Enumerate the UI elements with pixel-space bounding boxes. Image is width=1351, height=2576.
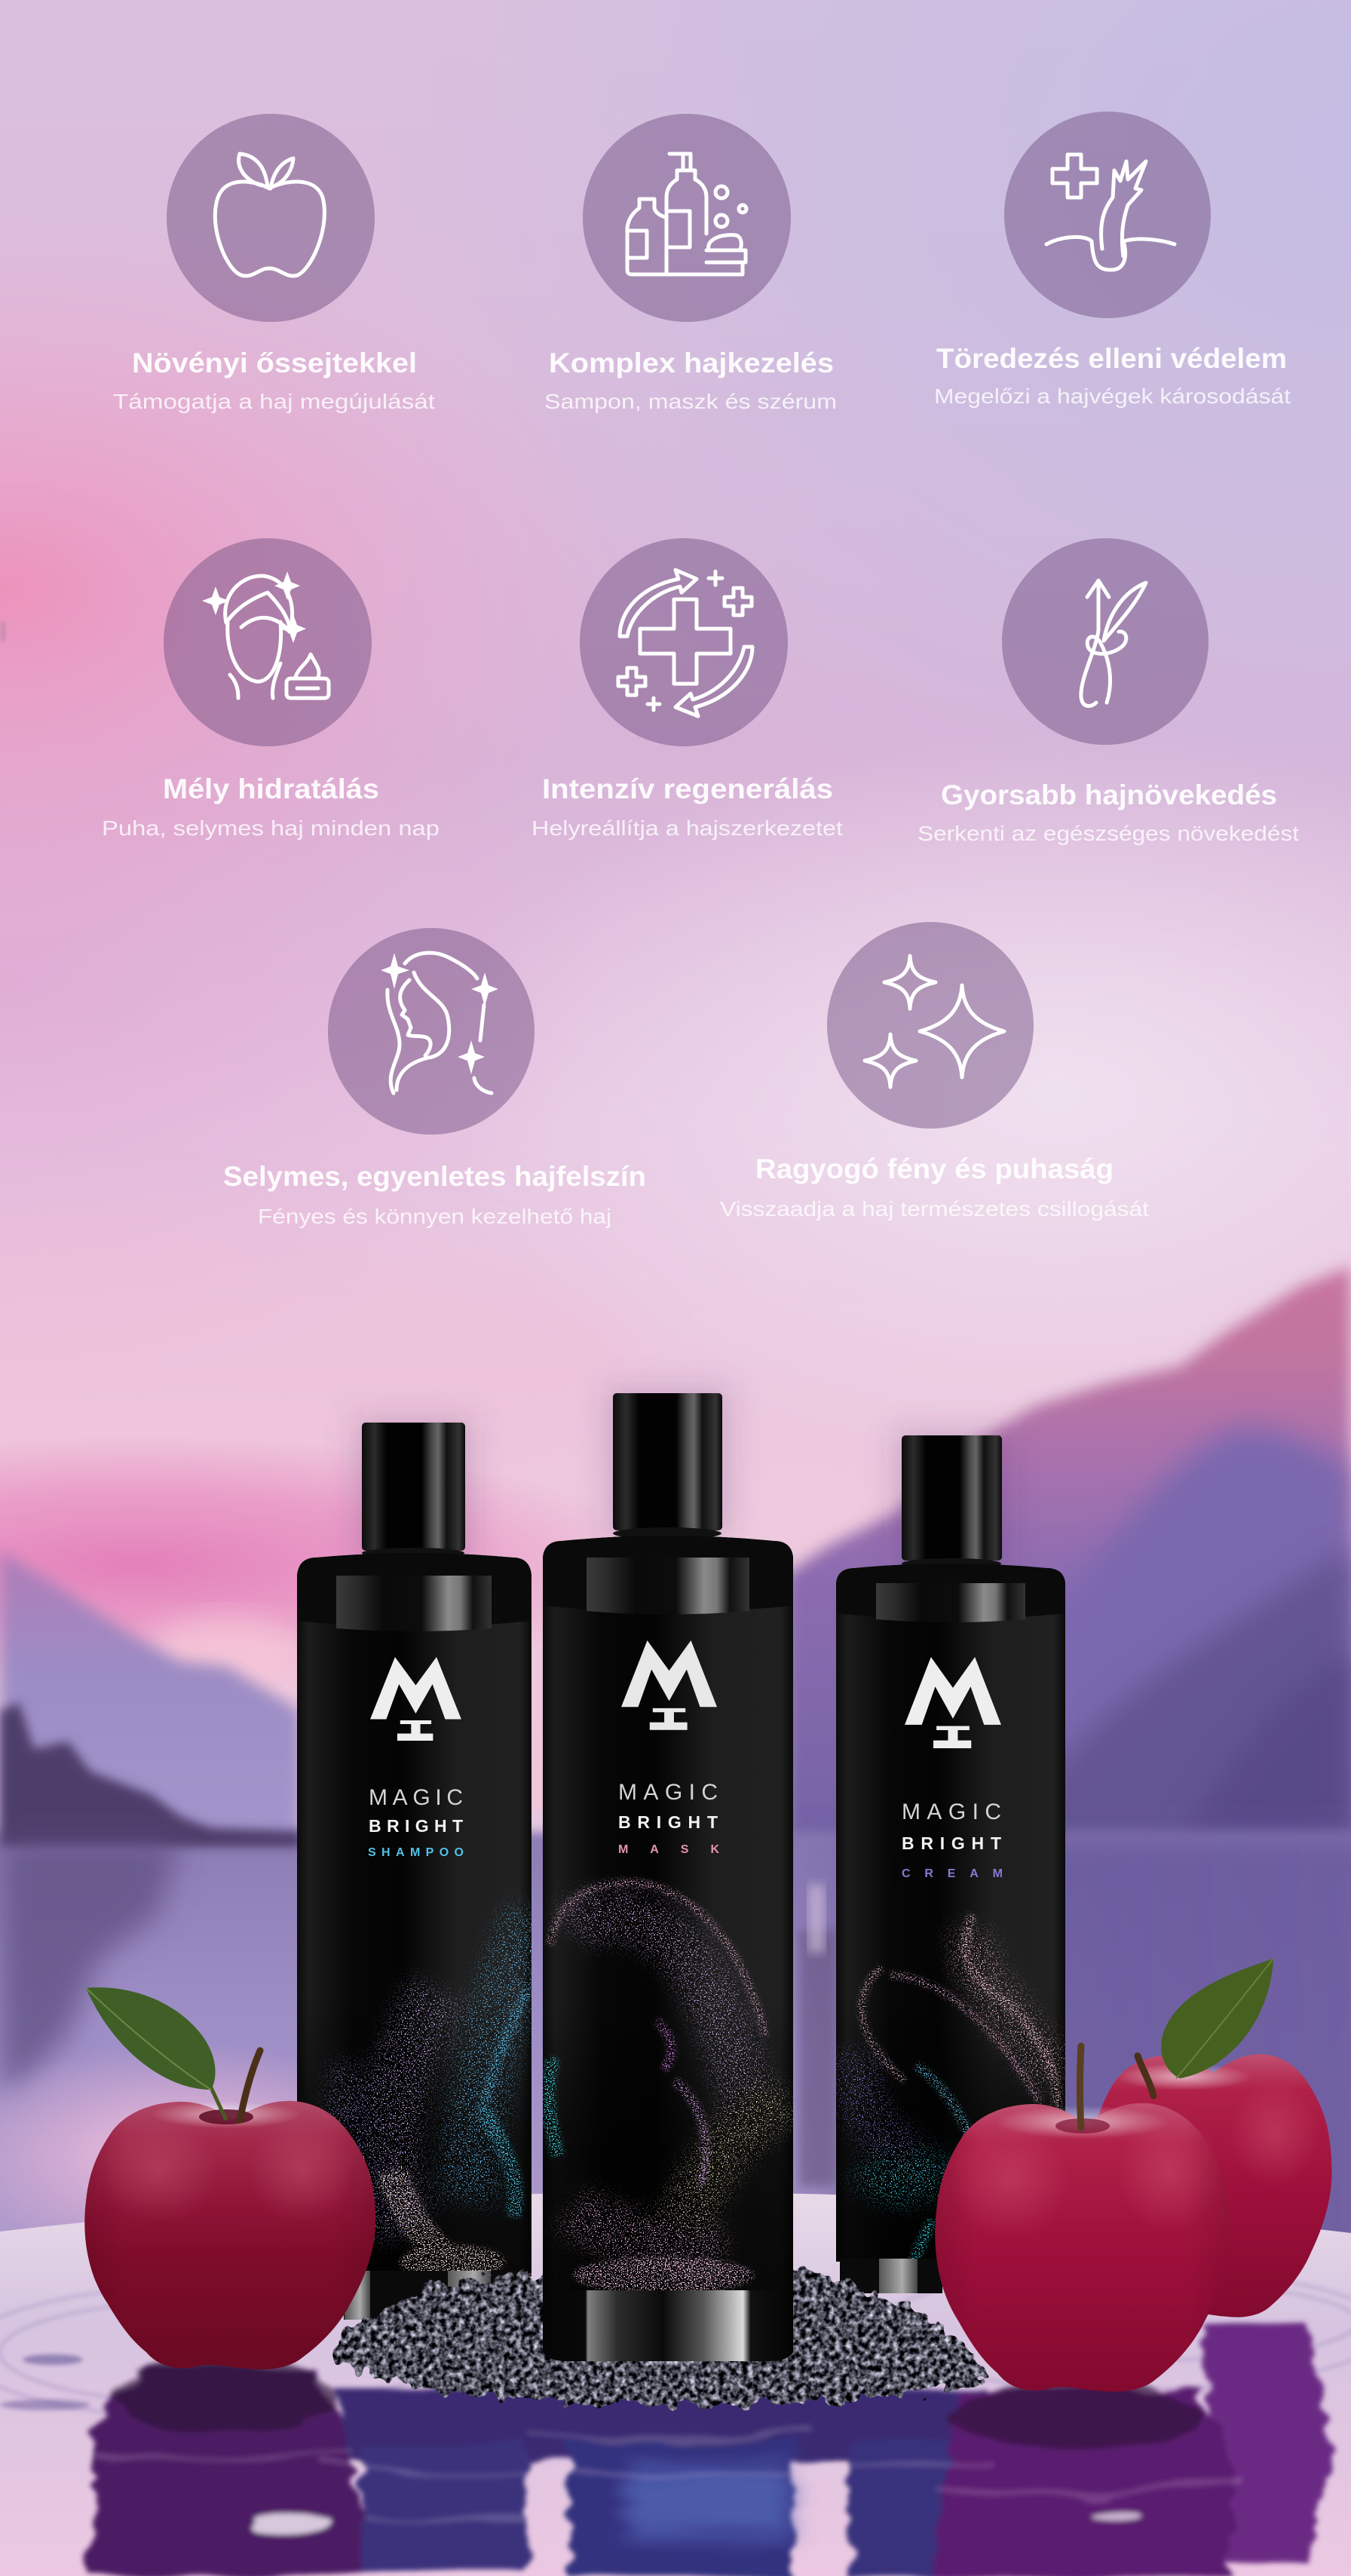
benefit: silky hair surface bbox=[223, 928, 646, 1228]
heading: Mély hidratálás bbox=[163, 773, 379, 804]
icon circle bbox=[580, 538, 788, 746]
reflection: center bottle bbox=[570, 2443, 793, 2576]
reflection: ripple highlights bbox=[83, 2431, 1244, 2522]
benefit: faster hair growth bbox=[918, 538, 1299, 845]
icon: apple bbox=[215, 154, 324, 276]
benefit: anti-breakage protection bbox=[934, 112, 1291, 408]
apple body bbox=[935, 2103, 1230, 2392]
apple body bbox=[1090, 2054, 1332, 2317]
background: sky gradient bbox=[0, 0, 1351, 1809]
lake bbox=[0, 1832, 1351, 2299]
icon: bottles bbox=[627, 154, 746, 274]
heading: Komplex hajkezelés bbox=[549, 348, 834, 378]
shoulder band bbox=[543, 1536, 793, 1612]
reflection: left bottle bbox=[362, 2443, 528, 2576]
description: Serkenti az egészséges növekedést bbox=[918, 822, 1299, 845]
icon: damaged hair bbox=[1046, 155, 1175, 270]
background: mountains and lake bbox=[0, 1267, 1351, 2299]
heading: Intenzív regenerálás bbox=[542, 773, 833, 804]
bottle body bbox=[543, 1536, 793, 2292]
icon: sparkles bbox=[865, 956, 1004, 1087]
benefit: intensive regeneration bbox=[532, 538, 843, 840]
description: Fényes és könnyen kezelhető haj bbox=[258, 1205, 611, 1228]
reflection: back apple bbox=[1206, 2322, 1334, 2563]
mountain: right dark ridge bbox=[1003, 1545, 1351, 1885]
logo bbox=[621, 1640, 717, 1730]
icon circle bbox=[827, 922, 1034, 1129]
heading: Növényi őssejtekkel bbox=[132, 348, 417, 378]
product name: MAGIC bbox=[902, 1800, 1001, 1824]
leaf bbox=[86, 1987, 216, 2090]
benefit: radiant shine and softness bbox=[720, 922, 1149, 1221]
description: Sampon, maszk és szérum bbox=[544, 390, 837, 413]
heading: Ragyogó fény és puhaság bbox=[755, 1153, 1114, 1184]
bottle base bbox=[344, 2271, 525, 2320]
description: Visszaadja a haj természetes csillogását bbox=[720, 1197, 1149, 1221]
bottle body bbox=[836, 1564, 1065, 2262]
reflection: left apple bbox=[83, 2367, 377, 2576]
icon circle bbox=[1004, 112, 1211, 318]
heading: Töredezés elleni védelem bbox=[936, 343, 1287, 374]
reflection: water glints bbox=[250, 2514, 326, 2532]
product name: MAGIC bbox=[618, 1780, 718, 1805]
product name: CREAM bbox=[902, 1867, 1003, 1880]
cap bbox=[613, 1393, 722, 1530]
product name: BRIGHT bbox=[618, 1812, 718, 1832]
water surface bbox=[0, 2192, 1351, 2576]
description: Támogatja a haj megújulását bbox=[113, 390, 435, 413]
benefit: complex hair care bbox=[544, 114, 837, 413]
shoulder band bbox=[836, 1564, 1065, 1619]
bottle body bbox=[297, 1553, 532, 2273]
apple: right front bbox=[935, 2046, 1230, 2392]
icon: towel head and cream bbox=[202, 571, 329, 698]
product name: SHAMPOO bbox=[368, 1846, 464, 1859]
product name bbox=[368, 1785, 464, 1859]
reflection: right bottle bbox=[849, 2443, 947, 2576]
icon circle bbox=[1002, 538, 1209, 745]
tree line bbox=[0, 1702, 302, 1847]
product name: BRIGHT bbox=[902, 1833, 1001, 1853]
left bottle bbox=[297, 1423, 535, 2320]
particle pattern bbox=[348, 1915, 535, 2278]
mountain: left ridge bbox=[0, 1551, 302, 1855]
heading: Selymes, egyenletes hajfelszín bbox=[223, 1161, 646, 1192]
logo bbox=[370, 1657, 461, 1741]
bottle shadows bbox=[354, 1387, 1009, 1574]
icon circle bbox=[164, 538, 372, 746]
product name: MASK bbox=[618, 1843, 719, 1856]
stem bbox=[1080, 2046, 1081, 2127]
icon: plus with arrows bbox=[618, 570, 752, 716]
product name bbox=[618, 1780, 719, 1856]
icon circle bbox=[583, 114, 791, 322]
product name bbox=[902, 1800, 1003, 1880]
apple: right back bbox=[1090, 1959, 1332, 2317]
apple body bbox=[84, 2101, 375, 2369]
particle pattern bbox=[548, 1883, 784, 2293]
mountain: right ridge bbox=[784, 1267, 1351, 1885]
particle pattern bbox=[858, 1915, 1057, 2262]
cap bbox=[362, 1423, 465, 1551]
water reflections bbox=[83, 2322, 1334, 2576]
icon circle bbox=[328, 928, 535, 1135]
bottle base bbox=[543, 2290, 793, 2361]
icon: growing hair bbox=[1081, 580, 1146, 706]
description: Puha, selymes haj minden nap bbox=[102, 816, 440, 840]
heading: Gyorsabb hajnövekedés bbox=[941, 780, 1277, 810]
cap bbox=[902, 1435, 1002, 1561]
stem bbox=[1138, 2056, 1153, 2096]
apple: left bbox=[84, 1987, 375, 2369]
right bottle bbox=[836, 1435, 1065, 2293]
benefit: deep hydration bbox=[102, 538, 440, 840]
benefit: plant stem cells bbox=[113, 114, 435, 413]
stem bbox=[240, 2051, 260, 2120]
mountain: right blue ridge bbox=[1040, 1429, 1351, 1885]
product name: MAGIC bbox=[369, 1785, 463, 1810]
description: Megelőzi a hajvégek károsodását bbox=[934, 384, 1291, 408]
icon: hair profile bbox=[381, 953, 498, 1093]
icon circle bbox=[167, 114, 375, 322]
center bottle bbox=[543, 1393, 793, 2361]
product name: BRIGHT bbox=[369, 1816, 463, 1836]
bottle base bbox=[840, 2259, 942, 2293]
leaf bbox=[1161, 1959, 1273, 2078]
shoulder band bbox=[297, 1553, 532, 1627]
reflection: central dark band bbox=[339, 2386, 988, 2461]
logo bbox=[905, 1657, 1001, 1748]
reflection: front apple bbox=[935, 2390, 1236, 2576]
gravel mound bbox=[335, 2269, 989, 2405]
description: Helyreállítja a hajszerkezetet bbox=[532, 816, 843, 840]
